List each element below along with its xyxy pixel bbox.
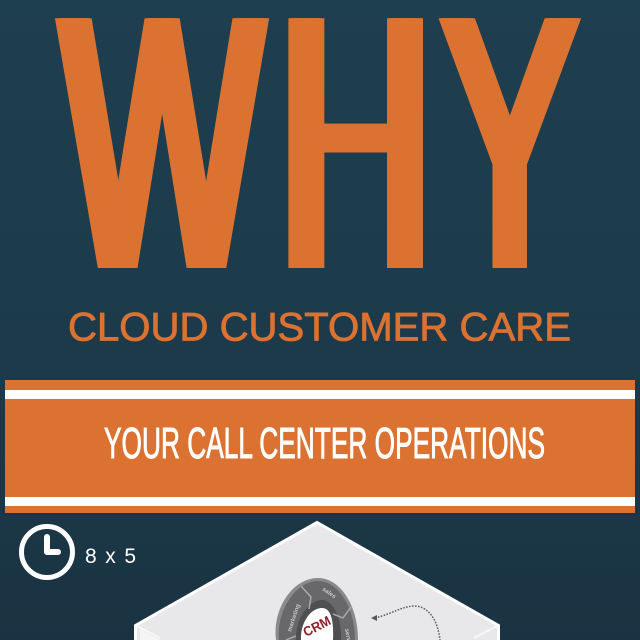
title: WHY (54, 0, 582, 345)
CRM wheel: marketing (287, 603, 302, 633)
icon: clock (22, 526, 72, 578)
isometric CRM platform (135, 522, 499, 640)
CRM wheel (275, 578, 358, 640)
subtitle: CLOUD CUSTOMER CARE (68, 306, 571, 350)
hours label: 8 x 5 (85, 545, 136, 568)
dotted arrow (371, 606, 440, 640)
CRM wheel: sales (321, 587, 337, 601)
CRM wheel: CRM (301, 613, 333, 640)
banner (5, 380, 635, 513)
